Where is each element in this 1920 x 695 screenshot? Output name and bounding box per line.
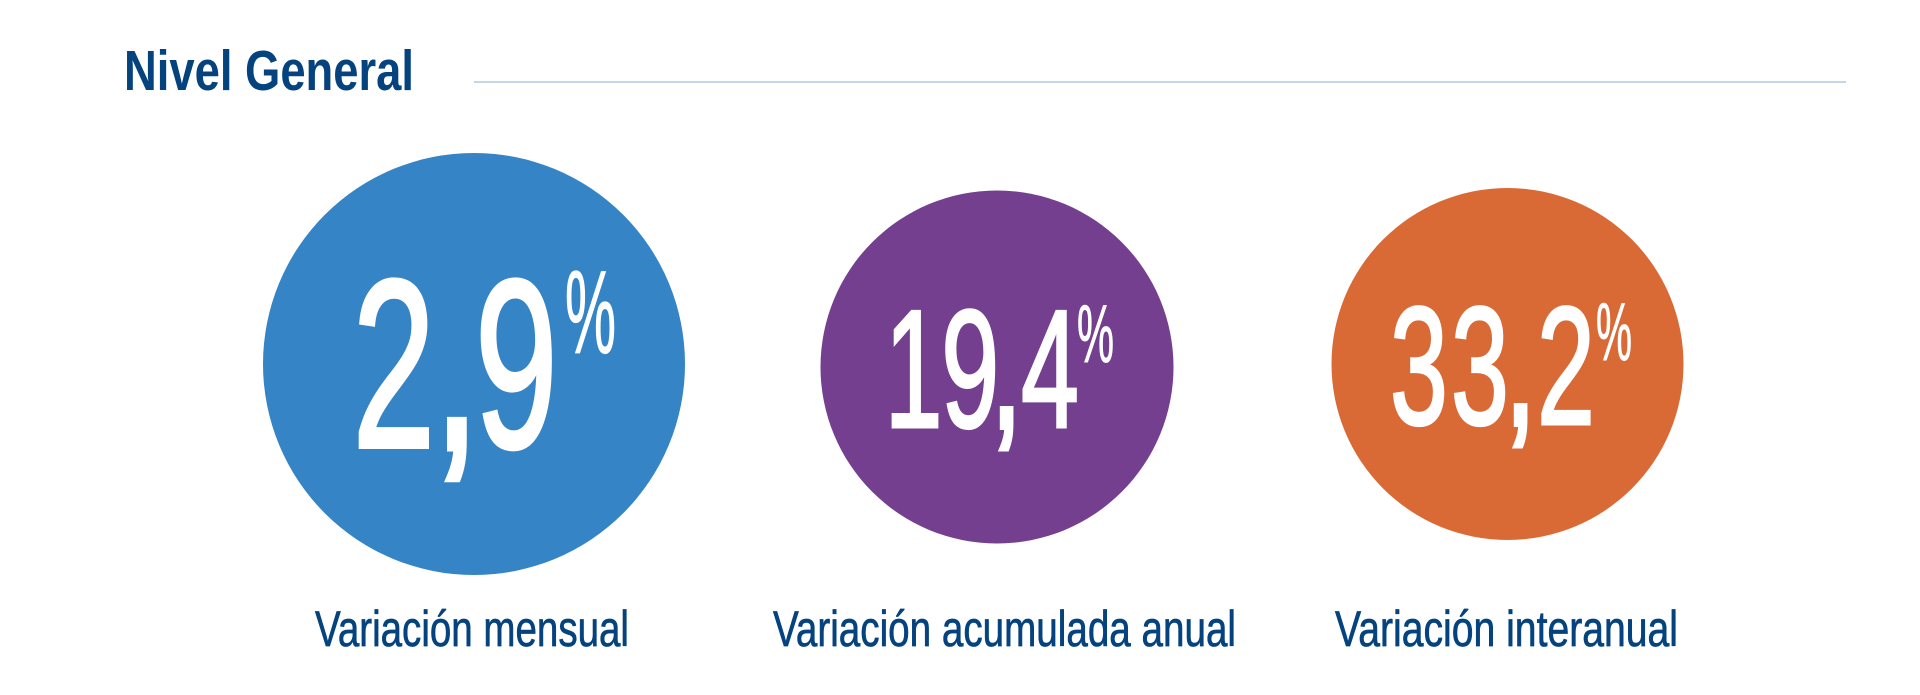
label: Variación acumulada anual <box>773 601 1236 657</box>
value: 19,4: 4 <box>1021 274 1079 463</box>
panel: variación acumulada anual <box>773 190 1236 657</box>
title: Nivel General <box>124 39 414 103</box>
panel: variación mensual: % <box>565 247 616 379</box>
label: Variación mensual <box>315 601 629 657</box>
value: 33,2: 2 <box>1537 271 1595 460</box>
value: 33,2: , <box>1506 271 1535 460</box>
percent sign: % <box>1077 289 1114 380</box>
panel: variación interanual: % <box>1596 287 1632 378</box>
circle: blue <box>263 153 685 575</box>
value: 2,9: 9 <box>475 231 558 499</box>
circle: orange <box>1332 188 1684 540</box>
value: 19,4: 19 <box>885 274 999 463</box>
value: 19,4: , <box>992 274 1021 463</box>
panel: variación interanual <box>1332 188 1684 657</box>
panel: variación mensual <box>263 153 685 657</box>
header rule <box>474 81 1846 83</box>
value: 2,9: , <box>436 231 477 499</box>
circle: purple <box>820 190 1174 544</box>
label: Variación interanual <box>1335 601 1678 657</box>
value: 33,2: 33 <box>1390 271 1509 460</box>
value: 2,9: 2 <box>352 231 435 499</box>
